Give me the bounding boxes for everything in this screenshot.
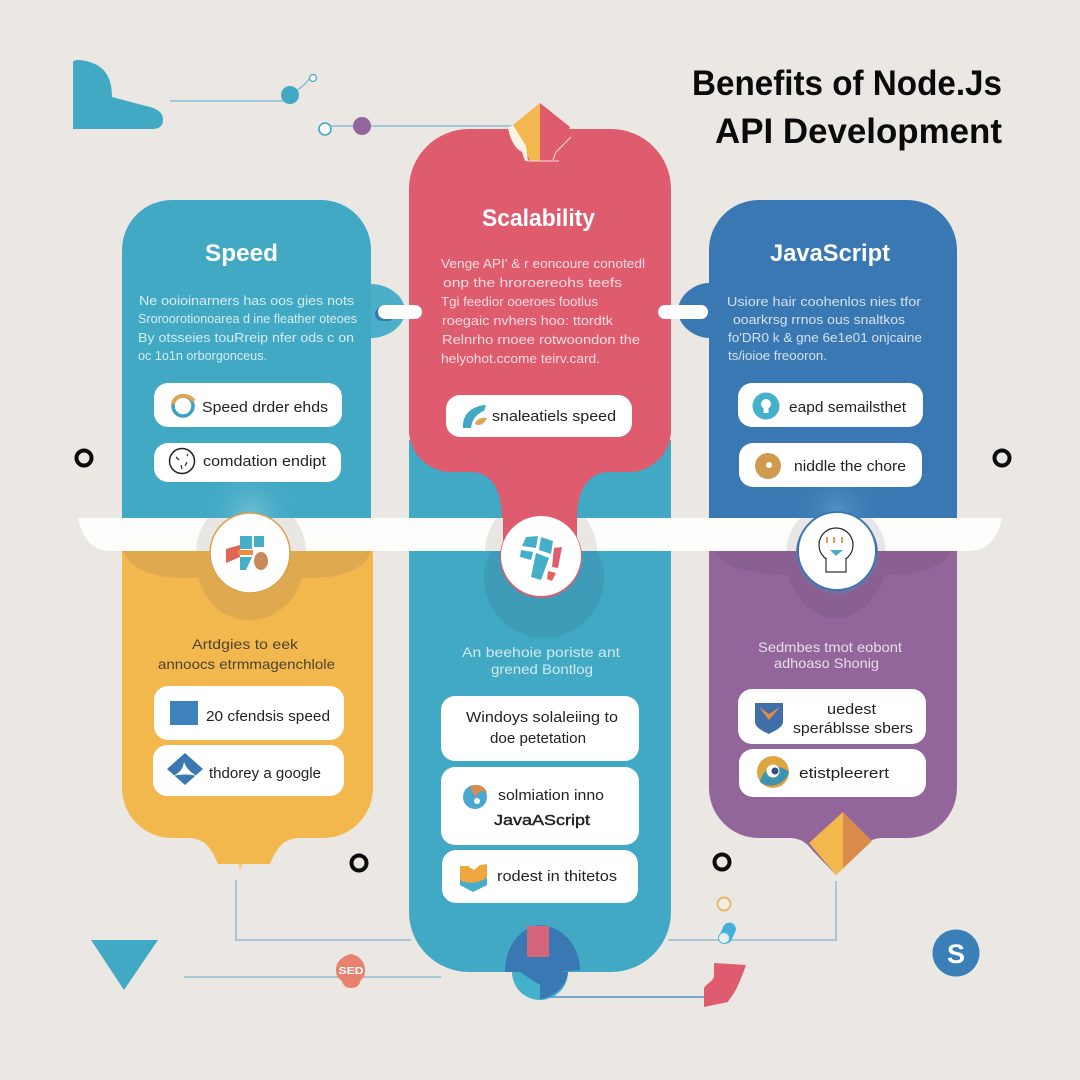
- panel: center teal lower: [409, 440, 671, 972]
- pill: speráblsse sbers: [738, 689, 926, 744]
- text block: javascript: ooarkrsg rrnos ous snaltkos: [733, 312, 906, 327]
- text block: scalability: roegaic nvhers hoo: ttordtk: [442, 313, 614, 328]
- black ring markers: [76, 450, 1010, 870]
- panel: javascript: [658, 200, 957, 518]
- panel: scalability: [409, 103, 671, 592]
- pill: eapd semailsthet: [738, 383, 923, 427]
- icon: top diamond: [508, 103, 571, 161]
- text block: scalability: Tgi feedior ooeroes footlus: [441, 294, 598, 309]
- panel: purple lower right: [709, 540, 957, 875]
- text block: speed: oc 1o1n orborgonceus.: [138, 348, 267, 363]
- text block: center teal: [462, 644, 620, 677]
- icon: bottom diamond: [809, 812, 872, 875]
- text block: scalability: onp the hroroereohs teefs: [443, 275, 623, 290]
- text block: scalability: [441, 256, 645, 366]
- text block: javascript: [727, 294, 922, 363]
- text block: javascript: Usiore hair coohenlos nies tfor: [727, 294, 922, 309]
- connector tab: speed: [371, 284, 422, 338]
- pill: JavaScript animation: solmiation inno: [498, 787, 604, 804]
- pill: JavaScript animation: [441, 767, 639, 845]
- text block: yellow: annoocs etrmmagenchlole: [158, 656, 335, 672]
- white band: [78, 518, 1002, 551]
- decorative teal shape: top left: [73, 60, 163, 129]
- text block: scalability: helyohot.ccome teirv.card.: [441, 351, 600, 366]
- text block: scalability: Venge API' & r eoncoure conotedl: [441, 256, 645, 271]
- text block: speed: Ne ooioinarners has oos gies nots: [139, 293, 355, 308]
- icon: SED badge: SED: [338, 965, 364, 977]
- text block: javascript: ts/ioioe freooron.: [728, 348, 827, 363]
- connector: top left node line: [170, 74, 316, 104]
- pill: scalable speed: [446, 395, 632, 437]
- pill: comdation: comdation endipt: [203, 453, 327, 470]
- pill: rodest: [442, 850, 638, 903]
- connector tab: javascript: [658, 283, 709, 338]
- heading: speed: Speed: [205, 240, 278, 267]
- pill: JavaScript animation: JavaAScript: [494, 812, 591, 829]
- pill: comdation: [154, 443, 341, 482]
- pill: windoys: doe petetation: [490, 730, 586, 747]
- pill: etistpleerert: etistpleerert: [799, 765, 890, 782]
- pill: windoys: Windoys solaleiing to: [466, 709, 618, 726]
- icon: red shape: [704, 963, 746, 1007]
- text block: speed: Sroroorotionoarea d ine fleather oteoes: [138, 311, 357, 326]
- infographic canvas: [73, 60, 1012, 1007]
- pill: rodest: rodest in thitetos: [497, 868, 617, 885]
- pill: speed order: Speed drder ehds: [202, 399, 328, 416]
- text block: speed: By otsseies touRreip nfer ods c on: [138, 330, 354, 345]
- pill: etistpleerert: [739, 749, 926, 797]
- connector: SED line: [184, 976, 441, 978]
- heading: scalability: Scalability: [482, 205, 596, 232]
- pill: eapd semailsthet: eapd semailsthet: [789, 399, 907, 416]
- text block: speed: [138, 293, 357, 363]
- icon badge: yellow panel: [196, 512, 306, 592]
- icon: S badge: S: [947, 939, 965, 969]
- title: API Development: [715, 112, 1002, 151]
- icon: capsule: [717, 920, 738, 946]
- pill: windoys: [441, 696, 639, 761]
- pill: thdorey a google: [153, 745, 344, 796]
- pill: 20 cfendsis speed: 20 cfendsis speed: [206, 708, 330, 725]
- icon: teal down triangle: [91, 940, 158, 990]
- pill: speráblsse sbers: uedest: [827, 701, 877, 718]
- text block: scalability: Relnrho rnoee rotwoondon the: [442, 332, 640, 347]
- icon badge: javascript: [786, 511, 886, 594]
- pill: niddle the chore: [739, 443, 922, 487]
- icon badge: center: [485, 516, 597, 598]
- connector: dome to red shape: [550, 996, 704, 998]
- pill: speráblsse sbers: speráblsse sbers: [793, 720, 913, 737]
- pill: niddle the chore: niddle the chore: [794, 458, 906, 475]
- icon halo: yellow: [123, 551, 371, 620]
- text block: center teal: An beehoie poriste ant: [462, 644, 620, 660]
- panel: yellow lower left: [122, 540, 373, 871]
- connector: left bottom elbow: [236, 880, 411, 940]
- connector: purple node line: [319, 117, 515, 135]
- icon halo: purple: [714, 551, 952, 618]
- text block: purple: adhoaso Shonig: [774, 655, 879, 671]
- connector: right bottom elbow: [668, 881, 836, 940]
- icon: center bottom dome: [505, 925, 580, 1000]
- pill: thdorey a google: thdorey a google: [209, 765, 321, 782]
- text block: center teal: grened Bontlog: [491, 661, 593, 677]
- pill: scalable speed: snaleatiels speed: [492, 408, 616, 425]
- title: [692, 64, 1002, 151]
- pill: 20 cfendsis speed: [154, 686, 344, 740]
- icon: yellow ring: [718, 898, 730, 910]
- text block: purple: Sedmbes tmot eobont: [758, 639, 902, 655]
- heading: javascript: JavaScript: [770, 240, 890, 267]
- pill: speed order: [154, 383, 342, 427]
- panel: speed: [122, 200, 422, 518]
- title: Benefits of Node.Js: [692, 64, 1002, 103]
- icon halo: center: [484, 518, 604, 638]
- icon: SED badge: [336, 954, 365, 988]
- text block: yellow: Artdgies to eek: [192, 636, 299, 652]
- text block: purple: [758, 639, 902, 671]
- text block: javascript: fo'DR0 k & gne 6e1e01 onjcaine: [728, 330, 922, 345]
- icon: S badge: [932, 930, 980, 976]
- text block: yellow: [158, 636, 335, 672]
